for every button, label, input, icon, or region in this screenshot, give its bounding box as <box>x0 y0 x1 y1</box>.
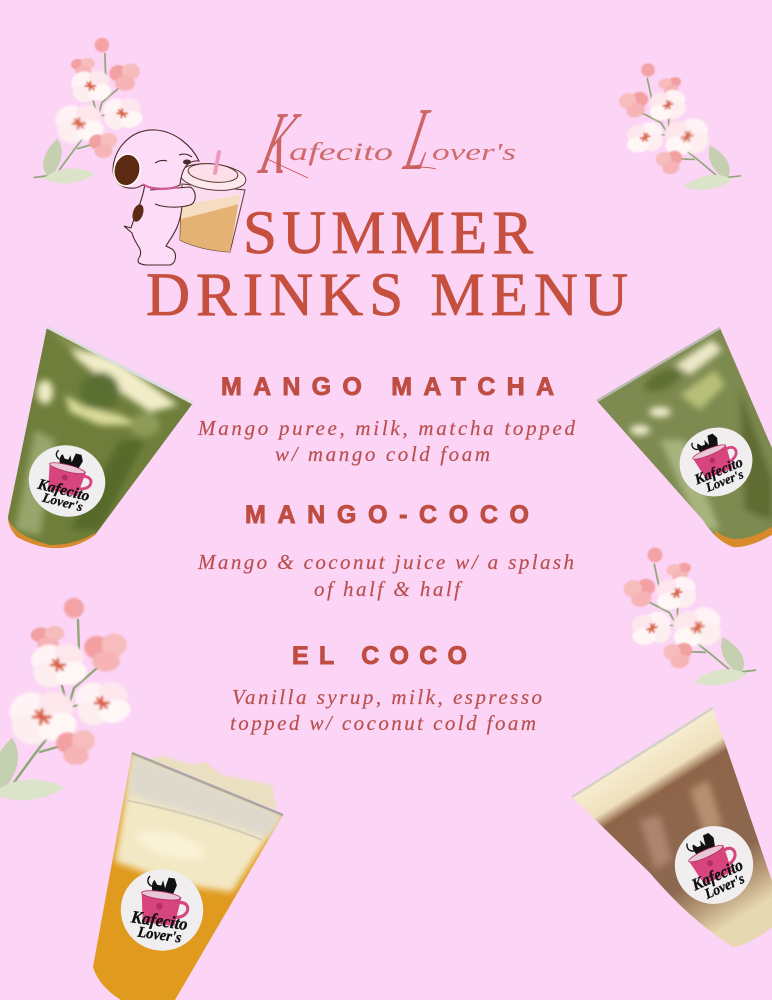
text: El Coco description: Vanilla syrup, milk, espresso <box>232 685 542 709</box>
heading: Mango Matcha: MANGO MATCHA <box>221 373 554 401</box>
icon: puppy hugging iced drink <box>111 130 247 265</box>
icon: top-right flower sprig <box>607 48 742 207</box>
panel: mango-coco item <box>197 501 574 601</box>
icon: puppy body <box>111 130 199 265</box>
title: Kafecito Lover's script: over's <box>432 140 516 166</box>
icon: cup sticker logo <box>669 417 763 507</box>
icon: bottom-left flower sprig <box>0 598 133 800</box>
icon: cup sticker logo <box>21 437 113 525</box>
title: Kafecito Lover's script: K <box>251 93 309 193</box>
title: Kafecito Lover's script: afecito <box>289 139 393 166</box>
text: Mango-Coco description: Mango & coconut juice w/ a splash <box>197 550 574 574</box>
icon: top-left flower sprig <box>34 38 145 183</box>
icon: middle-right flower sprig <box>611 531 757 704</box>
photo: mango matcha cup, top right <box>596 327 772 548</box>
icon: cup sticker logo <box>662 814 766 916</box>
heading: Mango-Coco: MANGO-COCO <box>245 501 529 529</box>
text: Mango-Coco description: of half & half <box>314 577 463 601</box>
icon: iced drink cup <box>179 152 247 252</box>
photo: mango coconut cup, bottom left <box>85 750 290 1000</box>
photo: el coco cup, bottom right <box>565 700 772 955</box>
text: El Coco description: topped w/ coconut cold foam <box>230 711 536 735</box>
heading: El Coco: EL COCO <box>292 642 467 670</box>
text: El Coco description <box>230 685 542 735</box>
text: Mango Matcha description: w/ mango cold foam <box>275 442 490 466</box>
text: Mango Matcha description: Mango puree, milk, matcha topped <box>197 416 576 440</box>
panel: mango matcha item <box>197 373 576 466</box>
title: Kafecito Lover's script <box>251 89 516 193</box>
icon: cup sticker logo <box>116 864 208 956</box>
heading: Drinks Menu: DRINKS MENU <box>146 262 628 329</box>
panel: el coco item <box>230 642 542 735</box>
title: Kafecito Lover's script: L <box>396 89 444 189</box>
photo: mango matcha cup, top left <box>8 326 194 548</box>
text: Mango Matcha description <box>197 416 576 466</box>
heading: Summer: SUMMER <box>243 200 533 267</box>
text: Mango-Coco description <box>197 550 574 601</box>
